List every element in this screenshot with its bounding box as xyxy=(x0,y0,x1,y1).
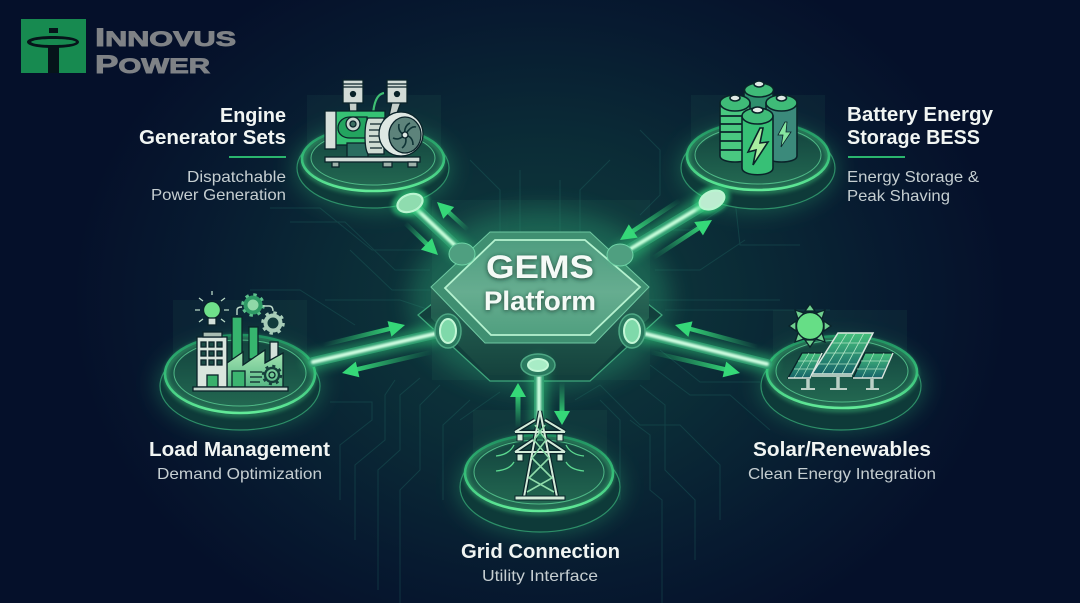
logo wordmark xyxy=(95,24,236,79)
arrows: solar xyxy=(650,317,758,381)
hub label: Platform xyxy=(484,286,596,316)
logo wordmark: INNOVUS xyxy=(95,24,236,52)
text: solar renewables: Clean Energy Integration xyxy=(748,466,936,483)
circuit traces xyxy=(250,130,830,603)
hub outer plate xyxy=(418,262,662,381)
arrows: grid xyxy=(510,382,570,428)
hub body xyxy=(431,232,649,375)
beam: engine xyxy=(388,184,475,265)
hub inner face xyxy=(445,240,640,335)
hub top face xyxy=(431,232,649,343)
text: engine generator sets: Dispatchable xyxy=(187,169,286,186)
text: battery energy storage: Battery Energy xyxy=(847,104,994,126)
icon: solar panels xyxy=(788,304,893,389)
hub glow xyxy=(410,210,670,390)
text: solar renewables: Solar/Renewables xyxy=(753,439,931,461)
panel: solar platform xyxy=(760,336,924,430)
tower body xyxy=(515,411,565,497)
text: battery energy storage: Energy Storage & xyxy=(847,169,979,186)
arrows: engine xyxy=(405,196,468,261)
hub: GEMS platform xyxy=(418,232,662,381)
arrows: load xyxy=(323,317,432,381)
text: load management: Load Management xyxy=(149,439,330,461)
text: engine generator sets: Generator Sets xyxy=(139,127,286,149)
arrows: battery xyxy=(616,200,716,258)
text: grid connection: Utility Interface xyxy=(482,568,598,585)
hub label: GEMS xyxy=(486,249,594,285)
text: solar renewables xyxy=(748,439,936,483)
panel: load platform xyxy=(158,335,322,430)
beam: battery xyxy=(607,180,735,266)
tower insulators xyxy=(517,434,563,461)
tower outline xyxy=(515,411,565,497)
text: grid connection xyxy=(461,541,620,585)
text: grid connection: Grid Connection xyxy=(461,541,620,563)
tower base xyxy=(515,496,565,500)
beam: grid xyxy=(521,354,555,420)
icon: transmission tower xyxy=(496,411,584,500)
beam: load xyxy=(313,314,461,362)
text: load management: Demand Optimization xyxy=(157,466,322,483)
panel: battery platform xyxy=(680,122,836,210)
hub label xyxy=(484,249,596,316)
text: engine generator sets: Engine xyxy=(220,105,286,127)
tower wires xyxy=(496,445,584,471)
logo mark xyxy=(21,19,86,73)
icon: load management factory xyxy=(193,291,288,391)
text: battery energy storage xyxy=(847,104,994,205)
logo xyxy=(21,19,236,79)
text: battery energy storage: Storage BESS xyxy=(847,127,980,149)
icon: engine generator xyxy=(325,80,423,167)
text: battery energy storage: Peak Shaving xyxy=(847,188,950,205)
panel: grid platform xyxy=(458,435,622,533)
logo wordmark: P OWER xyxy=(95,51,210,79)
panel: engine platform xyxy=(295,126,451,210)
beam: solar xyxy=(619,314,767,364)
text: load management xyxy=(149,439,330,483)
icon: battery cells xyxy=(720,81,797,175)
tower lattice xyxy=(527,425,554,492)
text: engine generator sets xyxy=(139,105,286,204)
text: engine generator sets: Power Generation xyxy=(151,187,286,204)
faint icon backdrops xyxy=(173,95,907,460)
